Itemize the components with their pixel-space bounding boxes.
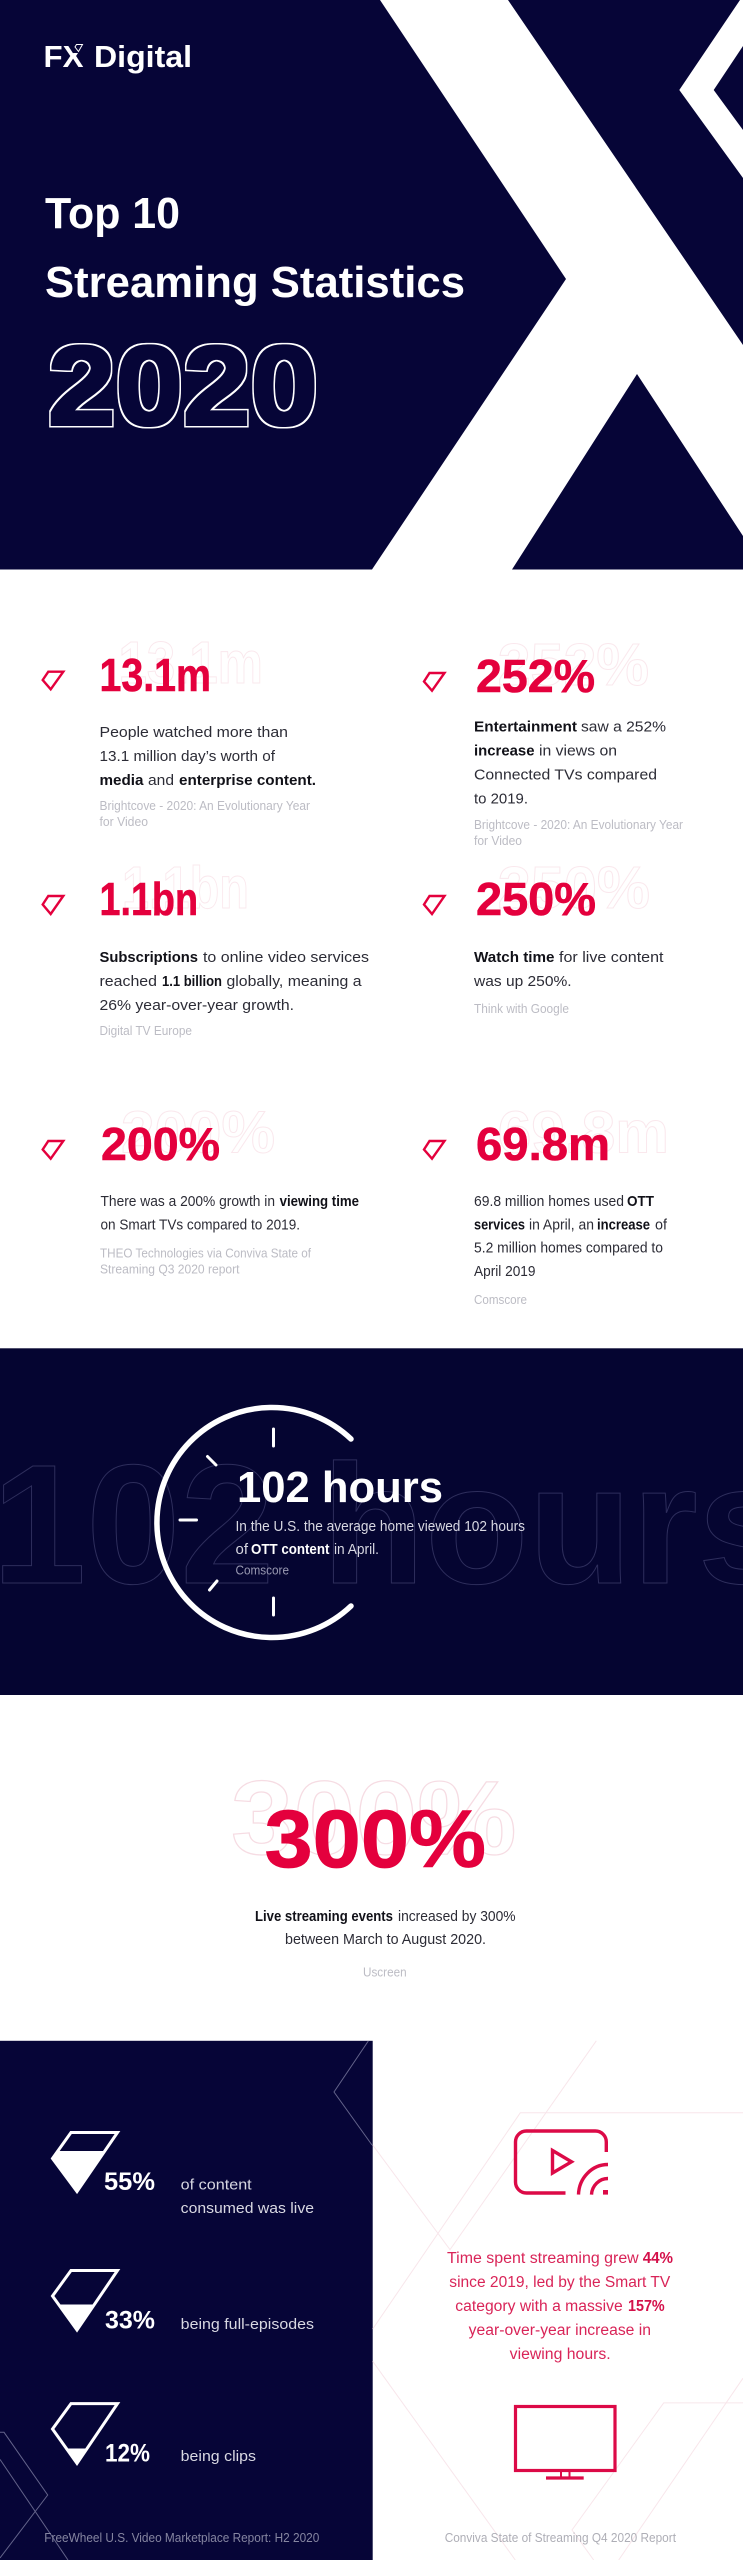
- source: [100, 1246, 311, 1276]
- icon: gem 33% full: [52, 2270, 118, 2330]
- ghost number: 13.1m: [118, 630, 263, 696]
- text block: April 2019: [474, 1263, 536, 1280]
- text block: Watch time: [474, 949, 554, 966]
- text block: There was a 200% growth in: [100, 1193, 275, 1210]
- source: Comscore: [236, 1564, 289, 1578]
- source: Conviva State of Streaming Q4 2020 Report: [445, 2530, 676, 2545]
- label: [181, 2176, 314, 2217]
- text block: [100, 1193, 359, 1234]
- icon: gem: [424, 1141, 444, 1159]
- item: 12%: [52, 2404, 256, 2467]
- text block: of: [655, 1216, 668, 1233]
- graphic: large white X shape: [372, 0, 743, 570]
- text block: [236, 1518, 525, 1558]
- ghost number: 1.1bn: [122, 855, 249, 921]
- label: being clips: [181, 2448, 256, 2465]
- source: Think with Google: [474, 1002, 569, 1016]
- text block: increase: [597, 1216, 650, 1233]
- source: Comscore: [474, 1293, 527, 1307]
- source: [100, 799, 310, 829]
- icon: gem 12% full: [52, 2404, 118, 2463]
- label: being full-episodes: [181, 2316, 314, 2333]
- number: 13.1m: [100, 649, 211, 701]
- source: [474, 818, 683, 848]
- text block: 5.2 million homes compared to: [474, 1240, 663, 1257]
- text block: 69.8 million homes used: [474, 1193, 624, 1210]
- source: Brightcove - 2020: An Evolutionary Year: [474, 818, 683, 832]
- source: Uscreen: [363, 1966, 407, 1980]
- text block: increase: [474, 742, 534, 760]
- panel: stat 300%: [231, 1760, 517, 1980]
- text block: since 2019, led by the Smart TV: [449, 2274, 671, 2291]
- panel: content breakdown: [0, 2041, 373, 2560]
- number: 250%: [476, 873, 596, 925]
- ghost number: 250%: [498, 855, 650, 921]
- text block: for live content: [559, 949, 664, 966]
- text block: on Smart TVs compared to 2019.: [100, 1216, 300, 1234]
- source: THEO Technologies via Conviva State of: [100, 1246, 311, 1260]
- number: 1.1bn: [100, 873, 198, 925]
- ghost number: 252%: [498, 632, 649, 698]
- icon: gem: [43, 1141, 63, 1159]
- text block: 26% year-over-year growth.: [100, 997, 294, 1014]
- text block: [447, 2250, 673, 2363]
- text block: [474, 1193, 668, 1280]
- logo: FX Digital: [44, 39, 192, 74]
- text block: category with a massive: [455, 2298, 623, 2315]
- text block: 13.1 million day’s worth of: [100, 748, 276, 765]
- label: consumed was live: [181, 2200, 314, 2217]
- item: 55%: [52, 2132, 314, 2217]
- panel: stat 252%: [424, 632, 683, 848]
- number: 252%: [476, 650, 595, 702]
- text block: increased by 300%: [398, 1908, 516, 1925]
- panel: time spent streaming: [373, 2041, 743, 2560]
- text block: 44%: [643, 2250, 673, 2267]
- title: Top 10: [45, 189, 180, 238]
- text block: [100, 949, 369, 1014]
- text block: to 2019.: [474, 790, 528, 808]
- icon: gem: [43, 896, 63, 914]
- panel: 102 hours: [0, 1348, 743, 1695]
- source: for Video: [474, 834, 522, 848]
- text block: enterprise content.: [179, 772, 316, 789]
- icon: gem: [424, 673, 444, 691]
- panel: hero header: [0, 0, 743, 570]
- item: 33%: [52, 2270, 314, 2334]
- number: 300%: [264, 1794, 486, 1885]
- text block: Live streaming events: [255, 1908, 393, 1925]
- text block: in views on: [539, 742, 617, 760]
- panel: stat 69.8m: [424, 1100, 669, 1307]
- value: 33%: [105, 2306, 155, 2334]
- panel: stat 200%: [43, 1100, 359, 1276]
- text block: OTT: [627, 1193, 654, 1210]
- source: Digital TV Europe: [100, 1024, 192, 1038]
- icon: clock: [157, 1407, 351, 1637]
- heading: outlined year 2020: 2020: [48, 324, 318, 448]
- icon: television: [516, 2406, 615, 2478]
- panel: stat 250%: [424, 855, 664, 1016]
- panel: stat 1.1bn: [43, 855, 369, 1038]
- title: Streaming Statistics: [45, 258, 465, 307]
- source: Streaming Q3 2020 report: [100, 1262, 240, 1276]
- text block: between March to August 2020.: [285, 1931, 486, 1948]
- text block: People watched more than: [100, 724, 288, 741]
- text block: in April, an: [529, 1216, 594, 1233]
- value: 12%: [105, 2439, 150, 2467]
- source: for Video: [100, 815, 148, 829]
- text block: saw a 252%: [581, 718, 666, 736]
- panel: stat 13.1m: [43, 630, 316, 829]
- ghost number: 300%: [231, 1760, 517, 1877]
- text block: Entertainment: [474, 718, 577, 736]
- ghost number: 69.8m: [498, 1100, 669, 1166]
- text block: viewing time: [280, 1193, 359, 1210]
- text block: in April.: [334, 1541, 379, 1558]
- number: 200%: [101, 1118, 220, 1170]
- text block: 157%: [628, 2298, 665, 2315]
- icon: cast screen: [516, 2131, 608, 2195]
- number: 69.8m: [476, 1118, 610, 1170]
- text block: was up 250%.: [473, 973, 572, 990]
- text block: media: [100, 772, 144, 789]
- text block: to online video services: [203, 949, 369, 966]
- text block: viewing hours.: [510, 2346, 611, 2363]
- graphic: white chevron top right: [679, 0, 743, 178]
- logo: FX Digital: Digital: [94, 39, 192, 74]
- text block: Subscriptions: [100, 949, 198, 966]
- icon: gem: [43, 672, 63, 689]
- icon: gem: [424, 896, 444, 914]
- text block: Connected TVs compared: [474, 766, 657, 784]
- text block: [255, 1908, 516, 1948]
- heading: 102 hours: [237, 1463, 443, 1512]
- icon: gem 55% full: [52, 2132, 118, 2192]
- source: FreeWheel U.S. Video Marketplace Report: H2 2020: [44, 2530, 319, 2545]
- text block: of: [236, 1541, 249, 1558]
- text block: Time spent streaming grew: [447, 2250, 640, 2267]
- text block: year-over-year increase in: [469, 2322, 651, 2339]
- text block: 1.1 billion: [162, 973, 222, 990]
- source: Brightcove - 2020: An Evolutionary Year: [100, 799, 310, 813]
- title: [45, 189, 465, 307]
- text block: [100, 724, 316, 789]
- ghost number: 200%: [121, 1100, 275, 1166]
- text block: In the U.S. the average home viewed 102 hours: [236, 1518, 525, 1535]
- text block: services: [474, 1216, 525, 1233]
- logo: FX Digital: FX: [44, 39, 84, 74]
- text block: and: [148, 772, 174, 789]
- label: of content: [181, 2176, 253, 2194]
- value: 55%: [104, 2168, 155, 2196]
- text block: globally, meaning a: [226, 973, 362, 990]
- text block: reached: [100, 973, 157, 990]
- text block: [474, 718, 666, 808]
- text block: OTT content: [251, 1541, 329, 1558]
- text block: [473, 949, 664, 990]
